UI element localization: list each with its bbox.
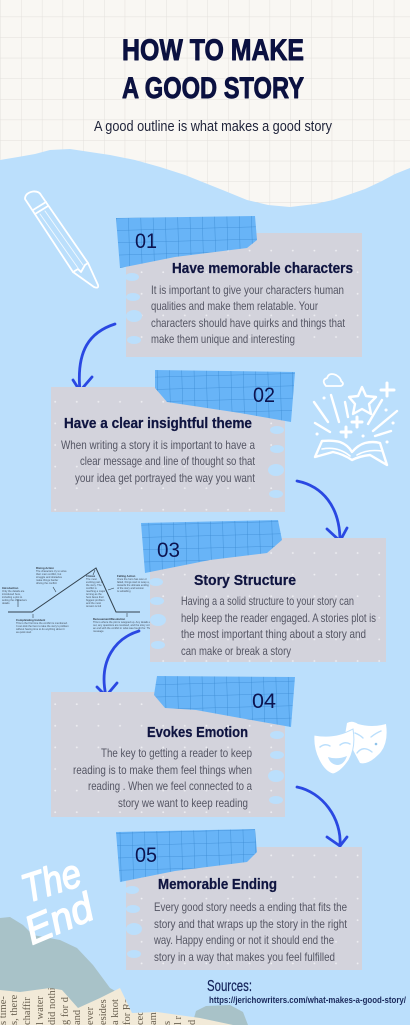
tape with number 04: 04 bbox=[252, 690, 276, 713]
body 3: the most important thing about a story and bbox=[181, 627, 366, 641]
body 4: reading is to make them feel things when bbox=[73, 763, 252, 777]
label: introduction: introduced here, bbox=[2, 592, 21, 596]
tape with number 02: 02 bbox=[253, 384, 275, 407]
label: complicating incident: It can kick the hero to take the story's problem bbox=[16, 624, 69, 628]
body 5: story in a way that makes you feel fulfilled bbox=[154, 950, 335, 964]
body 3: Having a a solid structure to your story can bbox=[181, 594, 354, 608]
label: climax: conflict is bbox=[86, 586, 97, 590]
label: rising action: The characters try to solve bbox=[36, 569, 67, 573]
label: rising action: make things harder bbox=[36, 578, 58, 582]
label: falling action: of the story and tension bbox=[117, 586, 145, 590]
label: rising action bbox=[36, 566, 67, 585]
torn book page collage: did nothi bbox=[47, 987, 58, 1025]
torn book page collage: a knot bbox=[110, 999, 121, 1025]
sources label: Sources: bbox=[207, 978, 252, 995]
label: complicating incident: This is the first time the conflict is mentioned. bbox=[16, 621, 68, 625]
label: falling action bbox=[117, 574, 151, 593]
heading 2: Have a clear insightful theme bbox=[64, 415, 252, 432]
the end lettering: End bbox=[18, 885, 102, 953]
torn book page collage: ced bbox=[135, 1010, 146, 1025]
label: introduction bbox=[2, 586, 28, 605]
body 4: The key to getting a reader to keep bbox=[101, 746, 252, 760]
label: climax: The most bbox=[86, 577, 97, 581]
body 2: clear message and line of thought so that bbox=[80, 454, 256, 468]
tape with number 03 bbox=[141, 520, 282, 573]
the end lettering: The bbox=[16, 851, 87, 912]
card 4 background bbox=[51, 692, 285, 817]
body 5: way. Happy ending or not it should end the bbox=[153, 933, 334, 947]
title: A GOOD STORY bbox=[122, 72, 304, 105]
torn book page collage bbox=[0, 987, 233, 1025]
heading 4: Evokes Emotion bbox=[147, 724, 248, 741]
title: HOW TO MAKE bbox=[122, 34, 304, 67]
label: climax: turning as the bbox=[86, 592, 102, 596]
torn book page collage: s, there bbox=[9, 994, 20, 1025]
body 2: your idea get portrayed the way you want bbox=[75, 471, 256, 485]
card 3 background bbox=[149, 538, 386, 662]
label: complicating incident bbox=[16, 618, 69, 634]
arrow: step 2 to 3 bbox=[297, 481, 347, 541]
icon: theatre masks bbox=[314, 722, 387, 774]
panel: step 2 bbox=[51, 370, 295, 512]
label: introduction: Introduction bbox=[2, 586, 19, 590]
chart: story structure diagram bbox=[2, 566, 161, 634]
label: rising action: struggle and obstacles bbox=[36, 575, 63, 579]
label: complicating incident: Complicating Incident bbox=[16, 618, 45, 622]
tape with number 03: 03 bbox=[157, 539, 180, 562]
card 5 background bbox=[125, 847, 362, 970]
panel: step 5 bbox=[116, 829, 362, 970]
heading 1: Have memorable characters bbox=[172, 260, 353, 277]
label: introduction: details bbox=[2, 601, 10, 605]
body 5: story and that wraps up the story in the right bbox=[154, 917, 348, 931]
label: rising action: their main conflict, but bbox=[36, 572, 62, 576]
label: falling action: failed, things start to wrap up bbox=[117, 580, 151, 584]
torn book page collage: esides bbox=[98, 999, 109, 1025]
label: denouement: an end with the conflict in what was fought for. The bbox=[93, 626, 152, 630]
torn sage paper bbox=[0, 917, 125, 1025]
the end lettering bbox=[16, 851, 102, 953]
tape with number 05: 05 bbox=[135, 844, 157, 867]
label: climax: biggest problem bbox=[86, 598, 104, 602]
arrow: step 3 to 4 bbox=[97, 631, 139, 696]
label: climax bbox=[86, 574, 105, 608]
label: denouement: out, any questions are resolved, and the story comes to bbox=[93, 623, 157, 627]
body 3: can make or break a story bbox=[181, 644, 291, 658]
arrow: step 1 to 2 bbox=[73, 324, 115, 391]
label: climax: hero faces their bbox=[86, 595, 104, 599]
tape with number 01: 01 bbox=[135, 230, 157, 253]
label: climax: reaching a major bbox=[86, 589, 105, 593]
label: introduction: including a plot to bbox=[2, 595, 23, 599]
title bbox=[122, 34, 304, 105]
body 1 bbox=[151, 283, 346, 346]
label: complicating incident: without having time to do anything about it bbox=[16, 627, 65, 631]
torn book page collage: and bbox=[72, 1009, 83, 1025]
body 1: qualities and make them relatable. Your bbox=[151, 299, 318, 313]
body 5 bbox=[153, 900, 348, 964]
card 1 background bbox=[125, 233, 362, 357]
icon: open book with stars bbox=[314, 374, 397, 465]
label: climax: and the most bbox=[86, 601, 101, 605]
torn book page collage: am bbox=[148, 1012, 159, 1025]
label: climax: tension is felt bbox=[86, 604, 101, 608]
torn sage paper small bbox=[192, 1005, 248, 1025]
label: introduction: Only the details are bbox=[2, 589, 25, 593]
label: denouement: This is where the plot is wrapped up. Any details are sorted bbox=[93, 620, 161, 624]
panel: step 1 bbox=[116, 216, 362, 357]
card 2 background bbox=[51, 387, 285, 512]
label: denouement: Denouement/Resolution bbox=[93, 617, 125, 621]
body 3 bbox=[181, 594, 376, 658]
torn book page collage: ever bbox=[85, 1006, 96, 1025]
label: falling action: towards the ultimate ending bbox=[117, 583, 149, 587]
heading 5: Memorable Ending bbox=[158, 876, 277, 893]
label: complicating incident: as quick start bbox=[16, 630, 32, 634]
label: climax: the story. The bbox=[86, 583, 102, 587]
tape with number 05 bbox=[116, 829, 257, 882]
icon: pencil bbox=[25, 191, 98, 288]
body 4: story we want to keep reading bbox=[118, 796, 248, 810]
body 1: characters should have quirks and things that bbox=[151, 316, 346, 330]
heading 3: Story Structure bbox=[194, 572, 296, 589]
torn book page collage: chaffir bbox=[22, 997, 33, 1025]
label: climax: Climax bbox=[86, 574, 96, 578]
body 1: It is important to give your characters human bbox=[151, 283, 344, 297]
tape with number 01 bbox=[116, 216, 257, 268]
panel: step 3 bbox=[141, 520, 386, 662]
body 2 bbox=[61, 438, 256, 485]
label: introduction: setting the characters bbox=[2, 598, 28, 602]
arrow: step 4 to 5 bbox=[297, 787, 347, 846]
label: falling action: Falling Action bbox=[117, 574, 136, 578]
body 5: Every good story needs a ending that fits the bbox=[154, 900, 347, 914]
body 2: When writing a story it is important to have a bbox=[61, 438, 255, 452]
label: falling action: is subsiding bbox=[117, 589, 131, 593]
torn book page collage: for Ra bbox=[122, 998, 133, 1025]
torn grid paper header bbox=[0, 0, 410, 207]
label: rising action: driving the conflict bbox=[36, 581, 57, 585]
torn book page collage: s bbox=[162, 1021, 173, 1025]
label: denouement bbox=[93, 617, 161, 633]
tape with number 04 bbox=[154, 676, 295, 727]
torn book page collage: l r bbox=[173, 1015, 184, 1025]
label: denouement: message bbox=[93, 630, 104, 633]
panel: step 4 bbox=[51, 676, 295, 817]
torn book page collage: d bbox=[187, 1019, 198, 1025]
label: climax: exciting part of bbox=[86, 580, 103, 584]
label: rising action: Rising Action bbox=[36, 566, 54, 570]
body 1: make them unique and interesting bbox=[151, 332, 295, 346]
body 4 bbox=[73, 746, 252, 810]
torn book page collage: l water bbox=[35, 996, 46, 1025]
label: falling action: Once the hero has won or bbox=[117, 577, 147, 581]
tape with number 02 bbox=[155, 370, 295, 422]
torn book page collage: g for d bbox=[60, 996, 71, 1025]
body 4: reading . When we feel connected to a bbox=[88, 779, 252, 793]
subtitle: A good outline is what makes a good story bbox=[94, 118, 332, 135]
